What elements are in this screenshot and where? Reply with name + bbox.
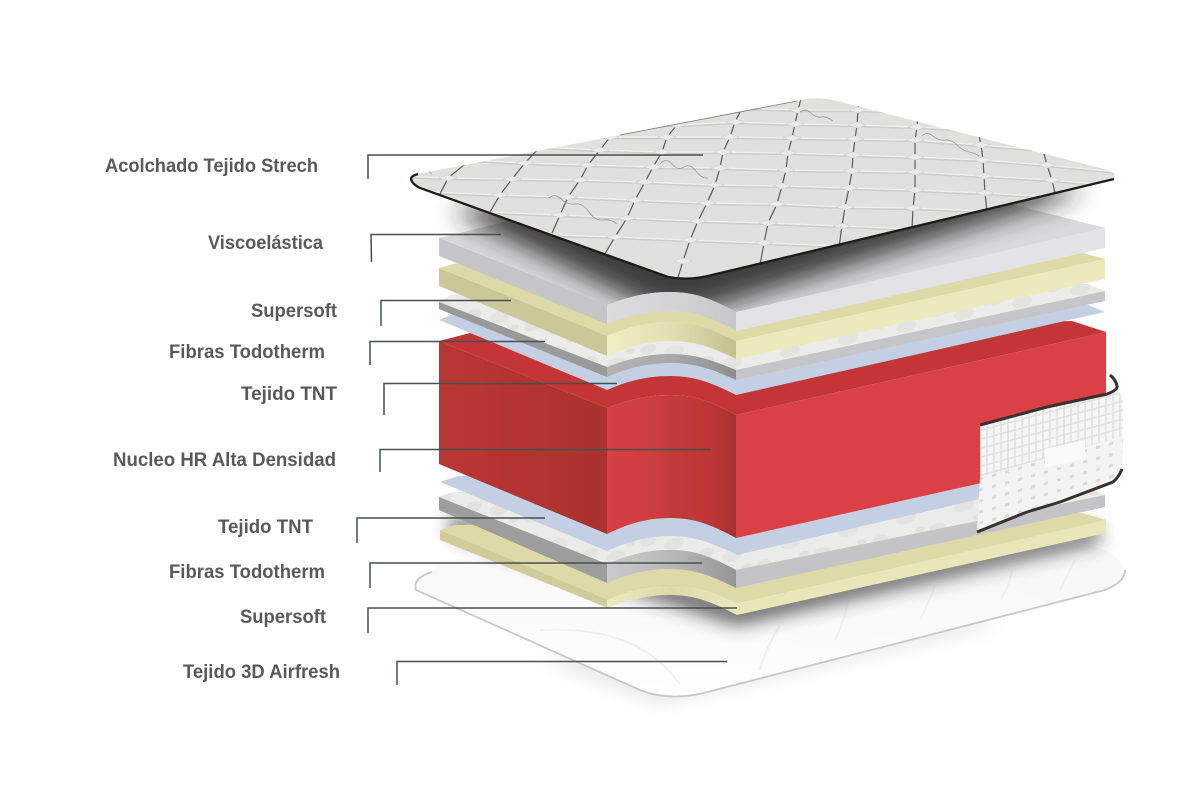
label: Viscoelástica: [208, 233, 501, 262]
leader line: [357, 518, 545, 543]
layer: lower Supersoft foam: [440, 513, 1106, 615]
label text: Acolchado Tejido Strech: [105, 156, 318, 177]
label text: Supersoft: [251, 301, 338, 322]
label: Tejido 3D Airfresh: [183, 662, 727, 685]
layer: lower Tejido TNT: [440, 460, 1106, 555]
label text: Tejido TNT: [241, 384, 337, 405]
layer: upper Supersoft foam: [439, 253, 1105, 359]
label text: Fibras Todotherm: [169, 562, 325, 583]
label text: Fibras Todotherm: [169, 342, 325, 363]
leader line: [368, 155, 703, 179]
leader line: [370, 342, 545, 365]
panel: layered mattress illustration: [400, 90, 1130, 704]
label: Tejido TNT upper: [241, 384, 617, 415]
layer: upper Fibras Todotherm: [439, 284, 1105, 380]
layer: Tejido 3D Airfresh base pad: [415, 515, 1125, 704]
layer: Viscoelástica grey foam: [439, 186, 1105, 331]
layer: Acolchado Tejido Strech quilted top: [400, 90, 1118, 284]
label text: Tejido TNT: [218, 517, 313, 538]
label: Fibras Todotherm upper: [169, 342, 545, 365]
label text: Nucleo HR Alta Densidad: [113, 450, 336, 471]
label: Fibras Todotherm lower: [169, 562, 702, 588]
label: Nucleo HR Alta Densidad: [113, 450, 711, 472]
leader line: [397, 662, 727, 685]
label text: Supersoft: [240, 607, 327, 628]
leader line: [381, 300, 511, 326]
mattress shadow: [444, 186, 1091, 312]
leader line: [384, 384, 617, 415]
label: Acolchado Tejido Strech: [105, 155, 703, 179]
label text: Viscoelástica: [208, 233, 323, 254]
leader line: [371, 234, 501, 262]
label: Tejido TNT lower: [218, 517, 545, 543]
layer: upper Tejido TNT: [439, 305, 1105, 395]
leader line: [368, 608, 737, 633]
leader line: [380, 450, 711, 472]
label text: Tejido 3D Airfresh: [183, 662, 340, 683]
layer: lower Fibras Todotherm: [439, 488, 1105, 588]
label: Supersoft lower: [240, 607, 737, 633]
label: Supersoft upper: [251, 300, 511, 326]
layer: Nucleo HR Alta Densidad red core: [439, 321, 1106, 538]
fabric swatch: mattress side cover: [976, 374, 1124, 534]
leader line: [370, 563, 702, 588]
